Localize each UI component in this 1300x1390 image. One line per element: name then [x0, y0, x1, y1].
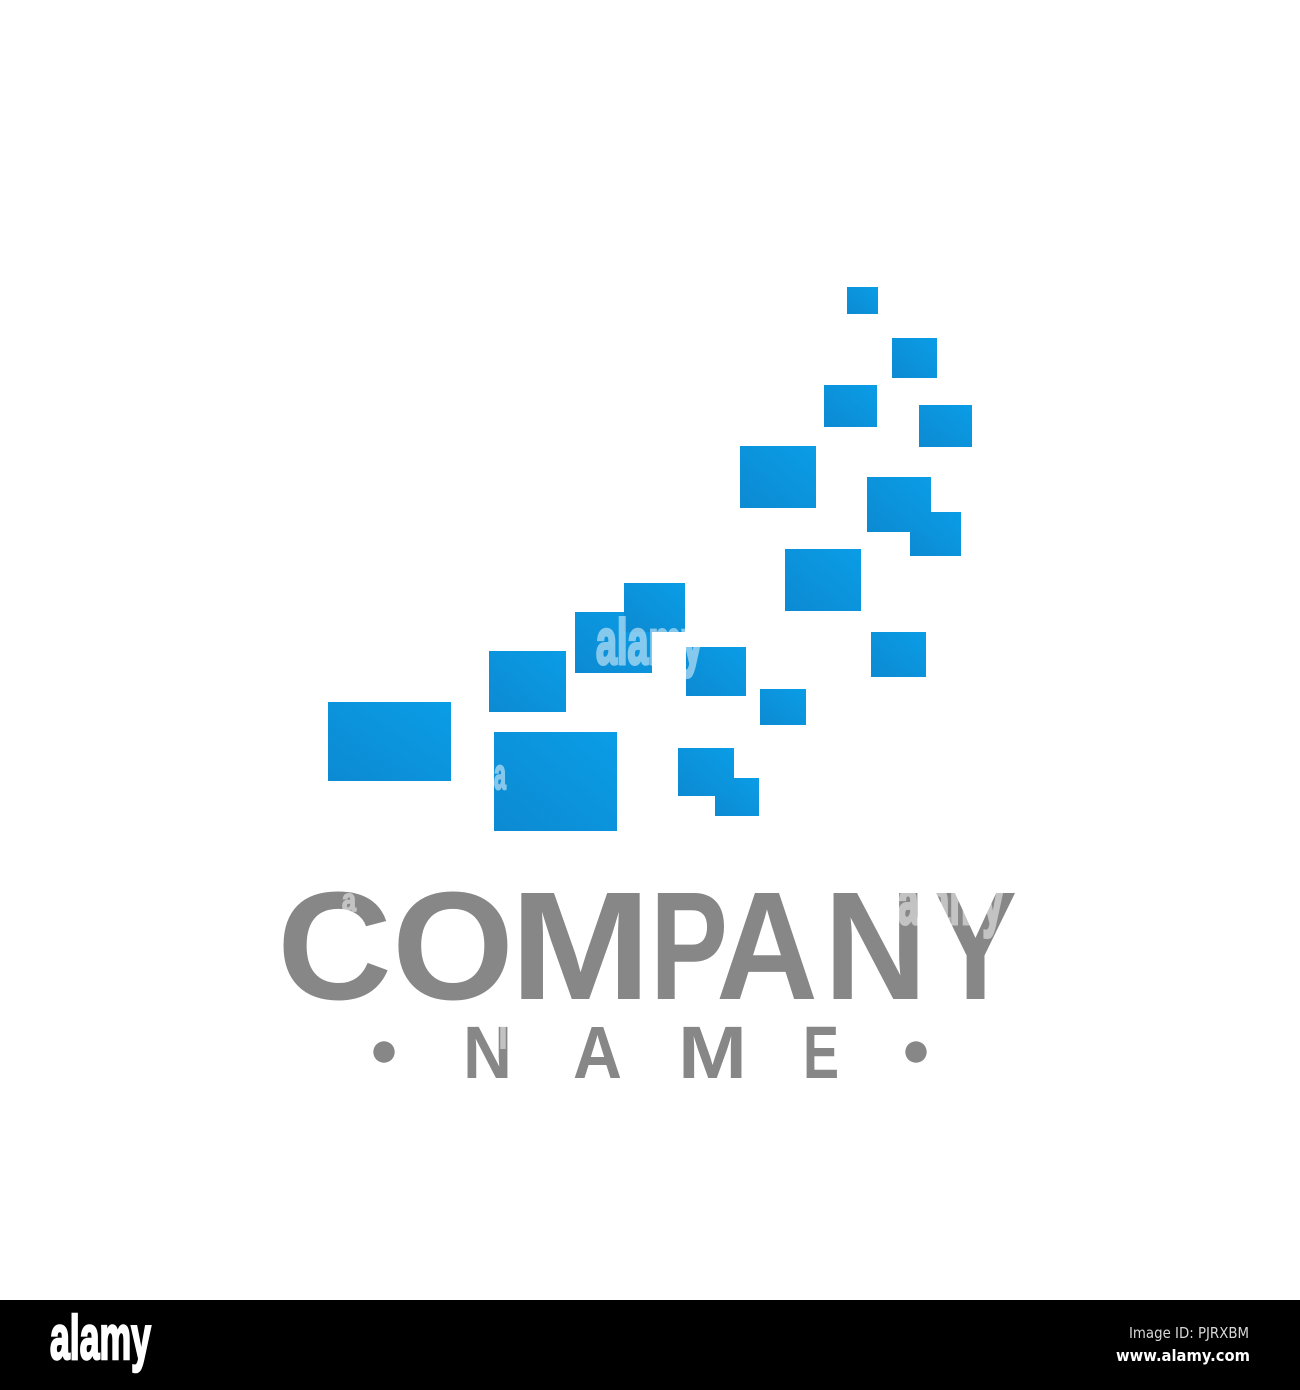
- name subtitle with dots: N: [463, 1011, 512, 1094]
- watermark fragments: alamy: [898, 866, 1003, 938]
- company wordmark: M: [510, 860, 651, 1032]
- name subtitle with dots: [373, 1011, 927, 1094]
- watermark fragments: a: [494, 750, 506, 799]
- watermark fragments: alamy: [596, 606, 703, 678]
- footer bar: Image ID: PJRXBM: [1129, 1324, 1249, 1342]
- logo icon: blue pixel squares forming a swoosh: [328, 287, 972, 831]
- footer bar: alamy: [50, 1304, 151, 1373]
- company wordmark: N: [824, 860, 927, 1032]
- name subtitle with dots: A: [573, 1011, 622, 1094]
- company wordmark: [277, 860, 1017, 1032]
- name subtitle with dots: M: [678, 1011, 747, 1094]
- company wordmark: A: [716, 860, 818, 1032]
- watermark fragments: l: [499, 1013, 507, 1057]
- watermark fragments: a: [342, 882, 356, 918]
- company wordmark: C: [277, 860, 392, 1032]
- footer bar: www.alamy.com: [1116, 1346, 1250, 1365]
- footer bar: [0, 1300, 1300, 1390]
- company wordmark: P: [650, 860, 728, 1032]
- company wordmark: Y: [934, 860, 1017, 1032]
- watermark fragments: [342, 606, 1003, 1057]
- company wordmark: O: [392, 860, 514, 1032]
- name subtitle with dots: E: [803, 1011, 839, 1094]
